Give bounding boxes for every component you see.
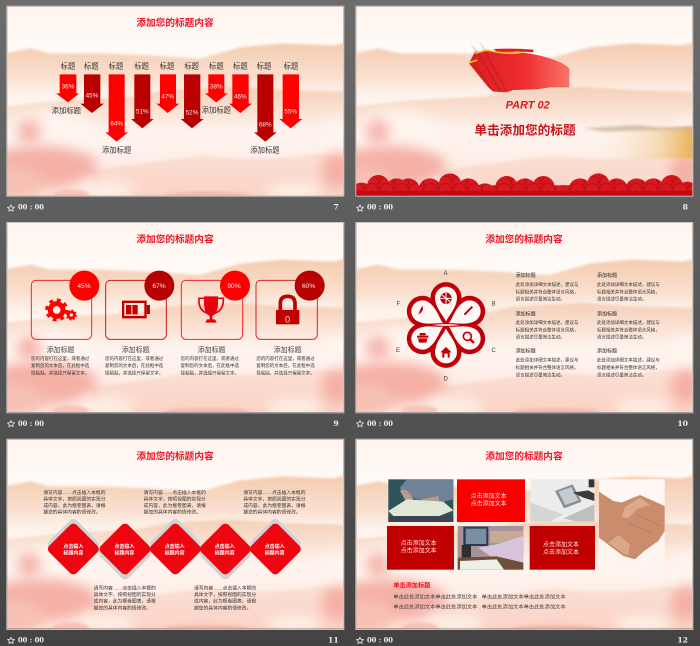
arrow chart xyxy=(52,62,302,155)
subtitle: 单击添加您的标题 xyxy=(474,122,576,137)
icon: magnifier xyxy=(463,332,474,343)
text block bottom 1: 请写内容……点击插入本框的 xyxy=(94,584,156,591)
text block 4: 标题相关并符合整体语言风格， xyxy=(597,326,660,333)
text block 3 xyxy=(516,310,578,341)
diamond row xyxy=(46,517,303,581)
footer: time: 00 : 00 xyxy=(367,203,393,212)
red scallop border xyxy=(356,173,692,196)
card 3: trophy: 复制您的文本后，在此框中选 xyxy=(181,362,239,369)
arrow chart: 标题 xyxy=(233,62,248,71)
footer: time: 00 : 00 xyxy=(18,636,44,645)
subheading: 单击添加标题 xyxy=(393,582,430,590)
body text: 单击此处添加文本单击此处添加文本 xyxy=(393,602,478,610)
dark red text box 2: 点击添加文本 xyxy=(543,548,579,556)
text block 5: 语言描述尽量简洁生动。 xyxy=(516,371,565,378)
text block top 1: 具体文字，按照视图的实现分 xyxy=(43,496,106,503)
footer: time: 00 : 00 xyxy=(18,203,44,212)
flower diagram: D xyxy=(444,377,449,383)
arrow chart: 标题 xyxy=(134,62,150,71)
flower diagram: B xyxy=(492,302,496,308)
footer: time: 00 : 00 xyxy=(367,419,393,428)
text block top 2: 具体文字，按照视图的实现分 xyxy=(144,496,206,503)
card 4: lock: 复制您的文本后，在此框中选 xyxy=(256,362,315,369)
card 3: trophy: 您的内容打在这里，或者通过 xyxy=(181,355,239,362)
text block top 2: 请写内容……点击插入本框的 xyxy=(144,489,206,496)
card 2: battery: 复制您的文本后，在此框中选 xyxy=(105,362,164,369)
arrow chart: 47% xyxy=(161,93,174,100)
text block bottom 1: 具体文字，按照视图的实现分 xyxy=(94,591,156,598)
card 2: battery xyxy=(105,271,174,376)
text block 5 xyxy=(516,347,578,378)
card 3: trophy xyxy=(181,271,250,376)
arrow chart: 添加标题 xyxy=(250,146,280,155)
red flag xyxy=(463,41,569,92)
flower diagram: A xyxy=(444,271,448,277)
title: 添加您的标题内容 xyxy=(485,450,563,462)
card 4: lock: 择粘贴，并选择只保留文字。 xyxy=(256,369,315,376)
golden mountains xyxy=(583,125,697,158)
footer: page number: 8 xyxy=(683,203,688,212)
card 4: lock: 您的内容打在这里，或者通过 xyxy=(256,355,315,362)
text block top 3: 具体文字，按照视图的实现分 xyxy=(243,496,306,503)
footer: star icon xyxy=(357,205,363,211)
text block bottom 1 xyxy=(94,584,156,611)
footer: star icon xyxy=(8,637,14,643)
text block 1: 此处添加详细文本描述，建议与 xyxy=(516,281,578,288)
text block top 3: 据您的具体内容酌情修改。 xyxy=(243,508,301,515)
card 1: gears: 45% xyxy=(77,283,91,290)
arrow chart: 添加标题 xyxy=(102,146,132,155)
text block 2 xyxy=(597,272,660,303)
arrow chart: 46% xyxy=(234,93,247,100)
text block 6 xyxy=(597,347,660,378)
dark red text box 1: 点击添加文本 xyxy=(401,547,437,555)
text block 6: 语言描述尽量简洁生动。 xyxy=(597,371,646,378)
icon: pencil xyxy=(464,307,472,315)
diamond row: 标题内容 xyxy=(265,550,285,557)
text block top 1: 据您的具体内容酌情修改。 xyxy=(43,508,101,515)
footer: page number: 9 xyxy=(333,419,339,428)
card 4: lock: 添加标题 xyxy=(274,345,302,354)
text block 6: 标题相关并符合整体语言风格， xyxy=(597,364,660,371)
slide 8: section cover xyxy=(326,6,700,212)
dark red text box 1: 点击添加文本 xyxy=(401,539,437,547)
card 3: trophy: 择粘贴，并选择只保留文字。 xyxy=(181,369,239,376)
arrow chart: 68% xyxy=(259,121,272,128)
card 1: gears: 您的内容打在这里，或者通过 xyxy=(31,355,90,362)
slide 11: diamond timeline xyxy=(0,439,353,645)
arrow chart: 标题 xyxy=(284,62,299,71)
icon: basket xyxy=(417,333,428,343)
text block bottom 2: 成内容，此为框卷图表，请根 xyxy=(194,598,256,605)
text block bottom 1: 据您的具体内容酌情修改。 xyxy=(94,604,151,611)
icon: house xyxy=(440,347,452,358)
card 3: trophy: 添加标题 xyxy=(198,345,226,354)
arrow chart: 55% xyxy=(284,109,297,116)
diamond row: 点击输入 xyxy=(63,543,83,550)
title: 添加您的标题内容 xyxy=(136,234,214,246)
body text: 单击此处添加文本单击此处添加文本 xyxy=(482,593,566,601)
arrow chart: 64% xyxy=(110,121,123,128)
text block bottom 2: 据您的具体内容酌情修改。 xyxy=(194,604,251,611)
arrow chart: 标题 xyxy=(61,62,76,71)
text block bottom 1: 成内容，此为框卷图表，请根 xyxy=(94,598,156,605)
slide 9: four cards xyxy=(0,222,353,428)
text block top 3: 成内容，此为框卷图表，请根 xyxy=(243,502,306,509)
flower diagram: C xyxy=(492,348,497,354)
arrow chart: 标题 xyxy=(109,62,124,71)
arrow chart: 36% xyxy=(62,83,75,90)
arrow chart: 51% xyxy=(136,109,149,116)
dark red text box 2 xyxy=(530,526,595,570)
photo: laptop at desk xyxy=(458,526,523,570)
slide 10: flower diagram xyxy=(326,222,700,428)
text block 1: 标题相关并符合整体语言风格， xyxy=(516,288,578,295)
icon: trophy xyxy=(199,296,223,323)
card 2: battery: 择粘贴，并选择只保留文字。 xyxy=(105,369,163,376)
icon: gears xyxy=(47,300,76,320)
text block 5: 此处添加详细文本描述，建议与 xyxy=(516,357,578,364)
body text xyxy=(393,593,566,610)
slide 7: arrow chart xyxy=(0,6,353,212)
text block bottom 2 xyxy=(194,584,256,611)
photo: tablet on desk xyxy=(530,479,594,521)
text block 1 xyxy=(516,272,578,303)
photo: signing document xyxy=(388,479,453,522)
dark red text box 1 xyxy=(387,526,454,570)
footer: star icon xyxy=(357,421,363,427)
card 4: lock: 60% xyxy=(302,283,315,290)
arrow chart: 添加标题 xyxy=(202,106,232,115)
text block top 1: 请写内容……点击插入本框的 xyxy=(43,489,106,496)
diamond row: 点击输入 xyxy=(165,543,185,550)
diamond row: 标题内容 xyxy=(165,550,185,557)
part label: PART 02 xyxy=(506,99,550,111)
text block 4 xyxy=(597,310,660,341)
footer: time: 00 : 00 xyxy=(367,636,393,645)
arrow chart: 45% xyxy=(86,93,99,100)
text block 6: 添加标题 xyxy=(597,347,617,354)
body text: 单击此处添加文本单击此处添加文本 xyxy=(393,593,478,601)
text block 3: 此处添加详细文本描述，建议与 xyxy=(516,319,578,326)
card 3: trophy: 90% xyxy=(227,283,241,290)
arrow chart: 标题 xyxy=(84,62,99,71)
text block 5: 添加标题 xyxy=(516,347,536,354)
text block 1: 添加标题 xyxy=(516,272,536,279)
red text box 1 xyxy=(457,479,525,522)
text block 1: 语言描述尽量简洁生动。 xyxy=(516,296,565,303)
icon: battery xyxy=(122,301,150,318)
footer: page number: 12 xyxy=(677,636,688,645)
arrow chart: 标题 xyxy=(160,62,175,71)
text block 2: 标题相关并符合整体语言风格， xyxy=(597,288,660,295)
text block top 1: 成内容，此为框卷图表，请根 xyxy=(43,502,106,509)
text block top 2: 成内容，此为框卷图表，请根 xyxy=(144,502,206,509)
diamond row: 点击输入 xyxy=(114,543,134,550)
text block 3: 语言描述尽量简洁生动。 xyxy=(516,334,565,341)
footer: page number: 11 xyxy=(328,636,339,645)
card 2: battery: 添加标题 xyxy=(122,345,150,354)
text block 6: 此处添加详细文本描述，建议与 xyxy=(597,357,660,364)
title: 添加您的标题内容 xyxy=(136,17,214,29)
diamond row: 标题内容 xyxy=(215,550,235,557)
text block top 2 xyxy=(144,489,206,515)
arrow chart: 添加标题 xyxy=(52,106,82,115)
text block 2: 添加标题 xyxy=(597,272,617,279)
diamond row: 标题内容 xyxy=(114,550,134,557)
photo: handshake xyxy=(599,479,665,570)
text block 5: 标题相关并符合整体语言风格， xyxy=(516,364,578,371)
card 1: gears: 复制您的文本后，在此框中选 xyxy=(31,362,90,369)
title: 添加您的标题内容 xyxy=(136,450,214,462)
red text box 1: 点击添加文本 xyxy=(471,492,507,500)
red text box 1: 点击添加文本 xyxy=(471,500,507,508)
text block 2: 此处添加详细文本描述，建议与 xyxy=(597,281,660,288)
slide 12: photo grid xyxy=(326,439,700,645)
footer: time: 00 : 00 xyxy=(18,419,44,428)
arrow chart: 标题 xyxy=(209,62,224,71)
card 1: gears: 择粘贴，并选择只保留文字。 xyxy=(31,369,89,376)
card 4: lock xyxy=(256,271,325,376)
footer: star icon xyxy=(8,421,14,427)
arrow chart: 52% xyxy=(186,110,199,117)
flower diagram xyxy=(396,271,497,383)
text block 3: 标题相关并符合整体语言风格， xyxy=(516,326,578,333)
text block top 3: 请写内容……点击插入本框的 xyxy=(243,489,306,496)
flower diagram: E xyxy=(396,348,400,354)
dark red text box 2: 点击添加文本 xyxy=(543,540,579,548)
text block 4: 语言描述尽量简洁生动。 xyxy=(597,334,646,341)
arrow chart: 38% xyxy=(210,83,223,90)
body text: 单击此处添加文本单击此处添加文本 xyxy=(482,602,566,610)
title: 添加您的标题内容 xyxy=(485,234,563,246)
card 2: battery: 67% xyxy=(152,283,166,290)
icon: globe xyxy=(440,293,452,304)
card 1: gears xyxy=(31,271,99,376)
card 2: battery: 您的内容打在这里，或者通过 xyxy=(105,355,164,362)
text block bottom 2: 请写内容……点击插入本框的 xyxy=(194,584,256,591)
text block 2: 语言描述尽量简洁生动。 xyxy=(597,296,646,303)
footer: star icon xyxy=(8,205,14,211)
text block top 3 xyxy=(243,489,306,515)
diamond row: 点击输入 xyxy=(265,543,285,550)
text block 4: 添加标题 xyxy=(597,310,617,317)
text block top 2: 据您的具体内容酌情修改。 xyxy=(144,508,201,515)
diamond row: 标题内容 xyxy=(63,550,83,557)
text block 4: 此处添加详细文本描述，建议与 xyxy=(597,319,660,326)
footer: page number: 10 xyxy=(677,419,688,428)
text block top 1 xyxy=(43,489,106,515)
card 1: gears: 添加标题 xyxy=(47,345,75,354)
icon: lock: 0 xyxy=(285,315,290,325)
arrow chart: 标题 xyxy=(184,62,200,71)
footer: page number: 7 xyxy=(333,203,339,212)
diamond row: 点击输入 xyxy=(215,543,235,550)
icon: rocket xyxy=(418,306,423,315)
text block 3: 添加标题 xyxy=(516,310,536,317)
flower diagram: F xyxy=(397,302,401,308)
footer: star icon xyxy=(357,637,363,643)
text block bottom 2: 具体文字，按照视图的实现分 xyxy=(194,591,256,598)
arrow chart: 标题 xyxy=(257,62,272,71)
